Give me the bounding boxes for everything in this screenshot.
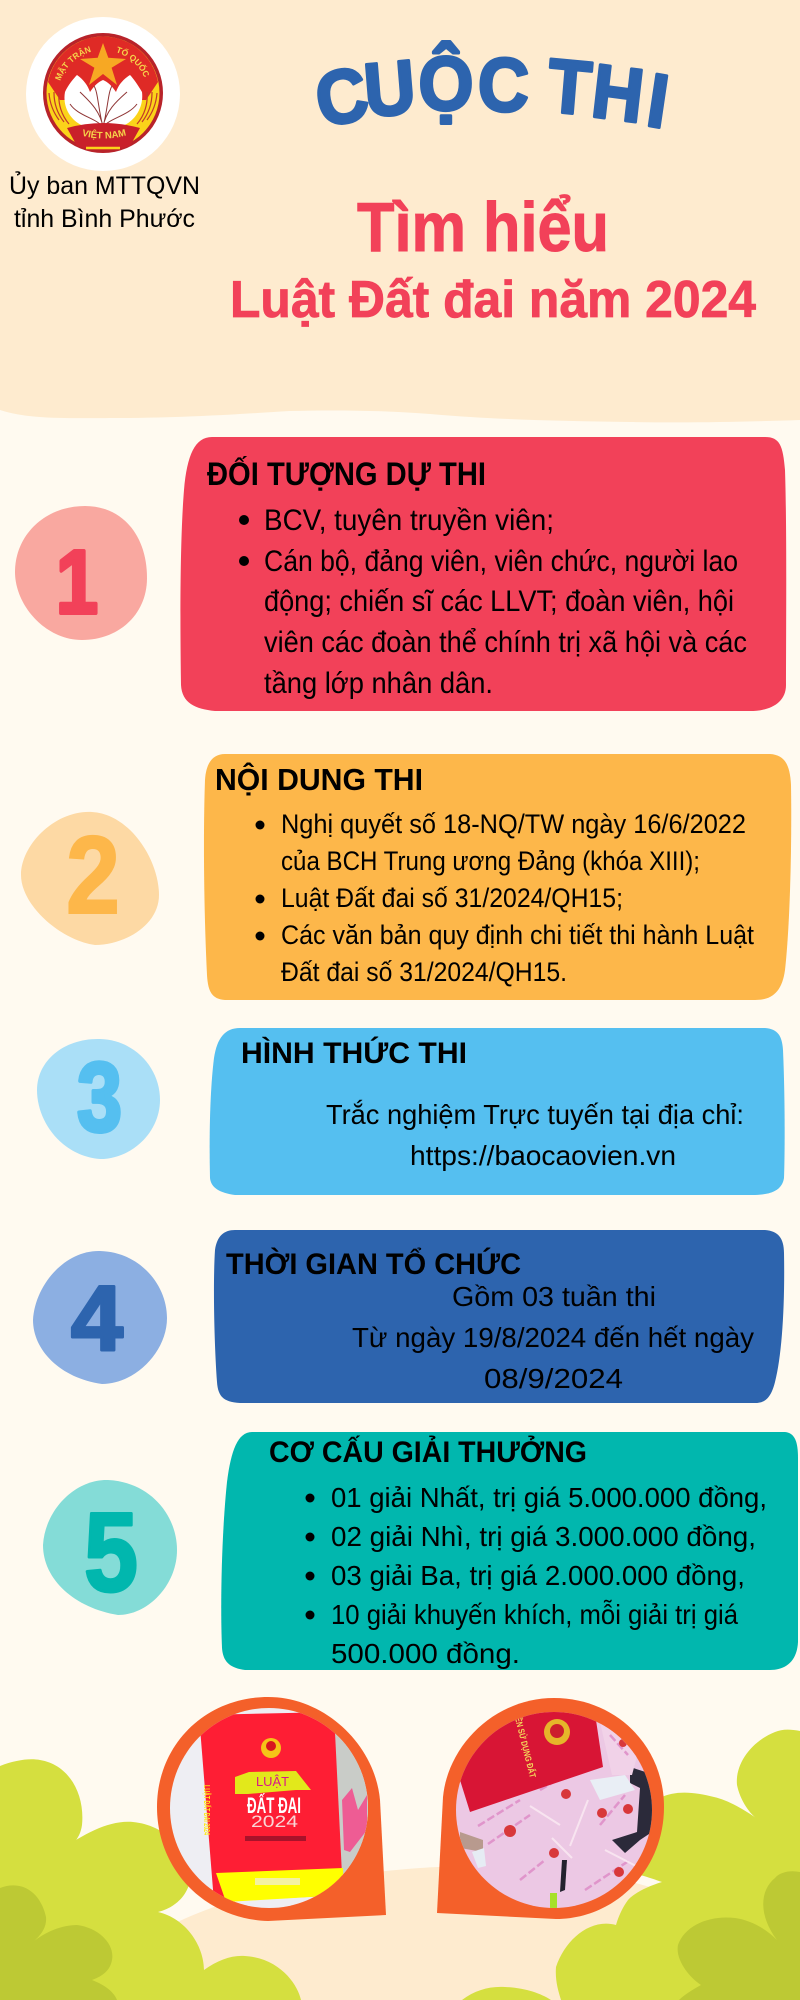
panel 1: đối tượng dự thi: viên các đoàn thể chính trị xã hội và các xyxy=(264,626,747,659)
logo badge: VIỆT NAM xyxy=(83,129,126,140)
panel 1: đối tượng dự thi xyxy=(180,437,786,711)
number badge 1: 1 xyxy=(56,533,98,633)
number badge 5 xyxy=(43,1480,177,1615)
photo frame left: law book: LUẬT ĐẤT ĐAI 2024 xyxy=(202,1785,212,1835)
photo frame left: law book: LUẬT xyxy=(256,1774,289,1789)
number badge 4 xyxy=(33,1251,167,1384)
panel 1: đối tượng dự thi: động; chiến sĩ các LLVT; đoàn viên, hội xyxy=(264,585,734,618)
panel 1: đối tượng dự thi: ĐỐI TƯỢNG DỰ THI xyxy=(207,456,486,492)
subtitle: tìm hiểu: Tìm hiểu xyxy=(357,188,609,266)
number badge 2: 2 xyxy=(66,814,120,937)
photo frame right: land certificates: ỀN SỬ DỤNG ĐẤT xyxy=(513,1716,539,1779)
panel 4: thời gian tổ chức: 08/9/2024 xyxy=(484,1363,623,1394)
panel 4: thời gian tổ chức: Gồm 03 tuần thi xyxy=(452,1281,656,1312)
ground mound xyxy=(100,1866,790,2000)
panel 5: cơ cấu giải thưởng: 03 giải Ba, trị giá 2.000.000 đồng, xyxy=(331,1560,745,1591)
number badge 4: 4 xyxy=(71,1268,123,1370)
panel 2: nội dung thi: của BCH Trung ương Đảng (khóa XIII); xyxy=(281,846,700,876)
organiser name xyxy=(9,170,200,233)
photo frame left: law book: ĐẤT ĐAI xyxy=(247,1793,301,1818)
number badge 2 xyxy=(21,812,159,945)
panel 5: cơ cấu giải thưởng: 10 giải khuyến khích, mỗi giải trị giá xyxy=(331,1599,738,1630)
panel 5: cơ cấu giải thưởng xyxy=(221,1432,798,1670)
panel 5: cơ cấu giải thưởng: 02 giải Nhì, trị giá 3.000.000 đồng, xyxy=(331,1521,756,1552)
organiser name: Ủy ban MTTQVN xyxy=(9,170,200,200)
title: cuộc thi: CUỘC THI xyxy=(309,41,674,145)
logo badge xyxy=(26,17,180,171)
panel 1: đối tượng dự thi: tầng lớp nhân dân. xyxy=(264,667,493,700)
panel 2: nội dung thi: Luật Đất đai số 31/2024/QH15; xyxy=(281,883,623,913)
subtitle: luật đất đai năm 2024: Luật Đất đai năm 2024 xyxy=(230,271,756,329)
logo badge: MẶT TRẬN xyxy=(55,46,91,80)
panel 4: thời gian tổ chức xyxy=(214,1230,784,1403)
photo frame right: land certificates xyxy=(437,1698,664,1919)
panel 2: nội dung thi: Các văn bản quy định chi tiết thi hành Luật xyxy=(281,920,754,950)
organiser name: tỉnh Bình Phước xyxy=(14,205,195,233)
panel 1: đối tượng dự thi: BCV, tuyên truyền viên; xyxy=(264,504,554,537)
panel 4: thời gian tổ chức: THỜI GIAN TỔ CHỨC xyxy=(226,1247,521,1281)
panel 5: cơ cấu giải thưởng: CƠ CẤU GIẢI THƯỞNG xyxy=(269,1435,587,1469)
panel 3: hình thức thi: HÌNH THỨC THI xyxy=(241,1036,467,1070)
number badge 5: 5 xyxy=(84,1490,138,1615)
number badge 3 xyxy=(37,1039,160,1159)
photo frame left: law book xyxy=(157,1697,386,1921)
logo badge: TỔ QUỐC xyxy=(118,46,149,77)
panel 3: hình thức thi: https://baocaovien.vn xyxy=(410,1140,676,1171)
panel 1: đối tượng dự thi: Cán bộ, đảng viên, viên chức, người lao xyxy=(264,545,738,578)
panel 4: thời gian tổ chức: Từ ngày 19/8/2024 đến hết ngày xyxy=(352,1322,754,1353)
panel 3: hình thức thi xyxy=(210,1028,785,1195)
panel 2: nội dung thi: NỘI DUNG THI xyxy=(215,761,423,797)
number badge 3: 3 xyxy=(77,1042,122,1152)
photo frame left: law book: 2024 xyxy=(251,1812,298,1831)
panel 5: cơ cấu giải thưởng: 01 giải Nhất, trị giá 5.000.000 đồng, xyxy=(331,1482,767,1513)
panel 2: nội dung thi: Nghị quyết số 18-NQ/TW ngày 16/6/2022 xyxy=(281,809,746,839)
panel 5: cơ cấu giải thưởng: 500.000 đồng. xyxy=(331,1638,520,1669)
panel 3: hình thức thi: Trắc nghiệm Trực tuyến tại địa chỉ: xyxy=(326,1099,744,1130)
header band xyxy=(0,0,800,422)
right bushes xyxy=(462,1730,800,2000)
number badge 1 xyxy=(15,506,147,640)
panel 2: nội dung thi: Đất đai số 31/2024/QH15. xyxy=(281,957,567,987)
panel 2: nội dung thi xyxy=(204,754,791,1000)
left bushes xyxy=(0,1759,301,2000)
